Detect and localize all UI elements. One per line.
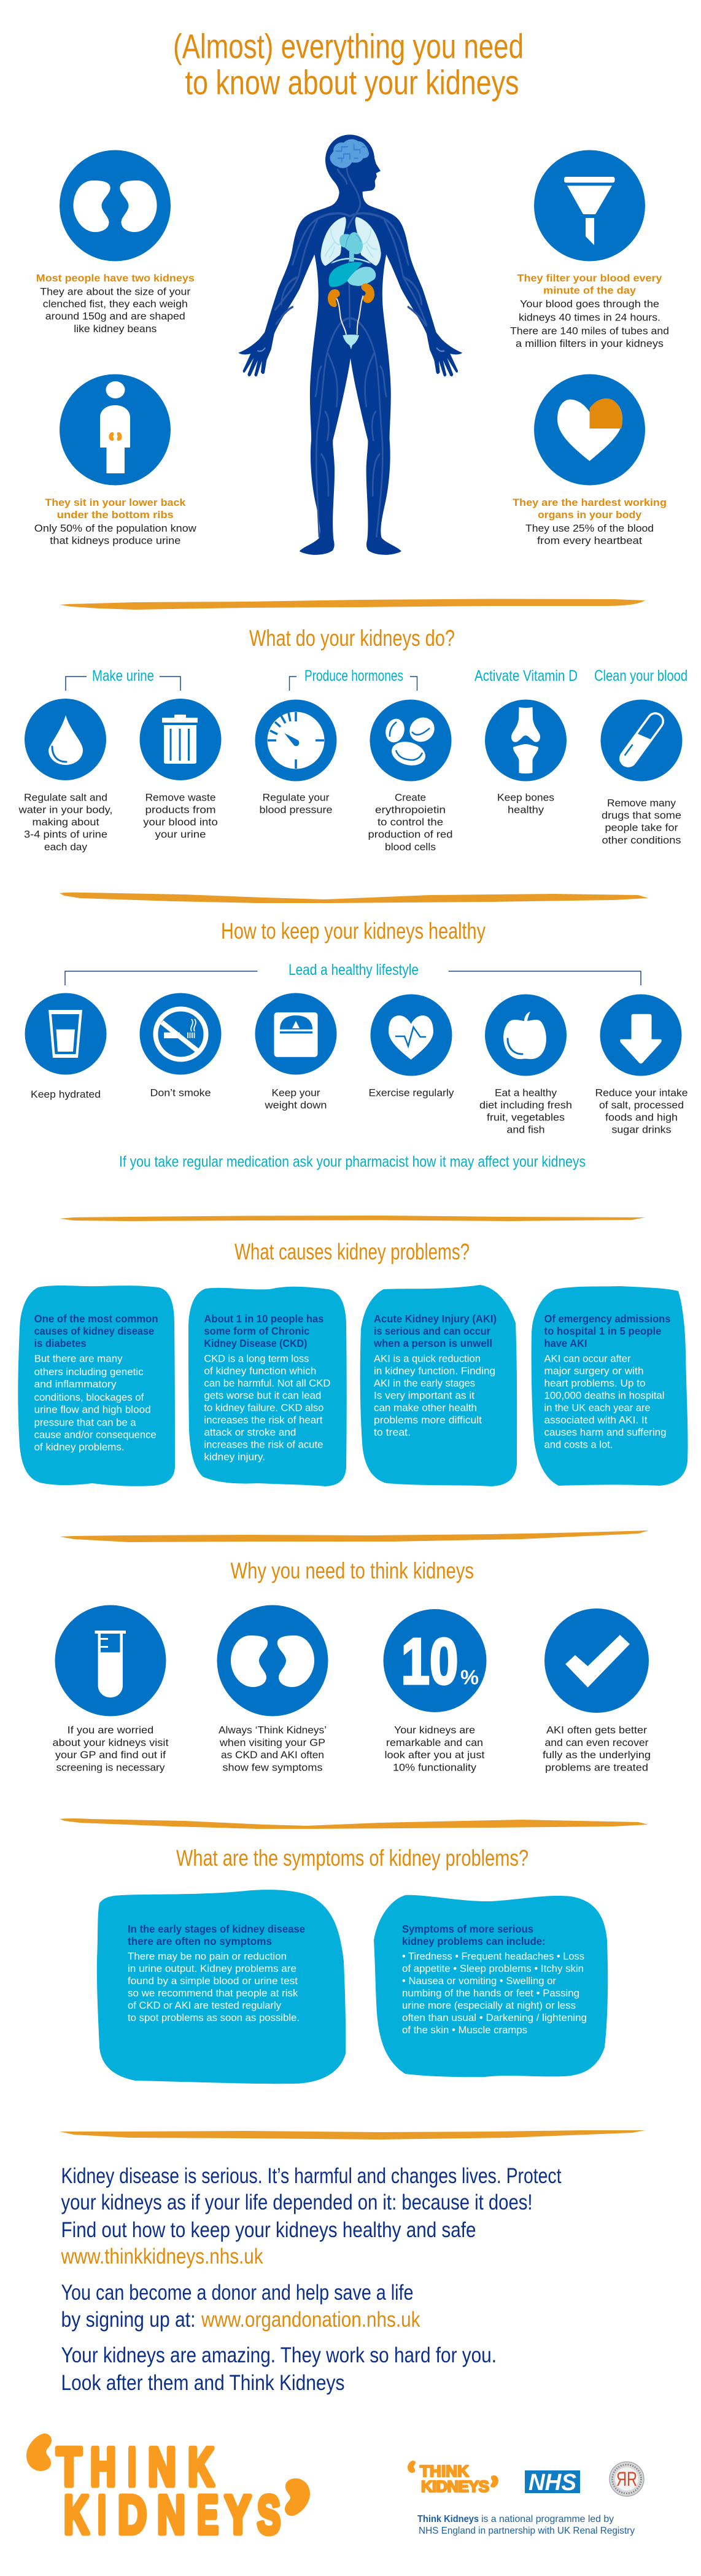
text: healthy diet: fruit, vegetables <box>487 1112 565 1123</box>
panel: AKI <box>360 1285 517 1486</box>
section: what do your kidneys do <box>18 626 687 853</box>
panel: CKD: some form of Chronic <box>204 1325 310 1337</box>
text block: clenched fist, they each weigh <box>43 298 188 310</box>
panel: diabetes: But there are many <box>34 1352 123 1364</box>
stomach <box>347 266 376 286</box>
panel: CKD: gets worse but it can lead <box>204 1389 321 1401</box>
text block: around 150g and are shaped <box>45 311 185 322</box>
text: remove drugs: other conditions <box>602 834 681 846</box>
logo: think kidneys large <box>26 2434 310 2545</box>
icon: person with kidneys <box>60 374 171 485</box>
heading: Why you need to think kidneys <box>231 1558 474 1583</box>
text: always think kidneys: show few symptoms <box>222 1762 323 1773</box>
label: make urine with bracket: Make urine <box>92 667 154 685</box>
panel: early stages: there are often no symptoms <box>128 1935 272 1947</box>
text block <box>36 273 195 335</box>
text: AKI recovery <box>543 1724 651 1773</box>
text: AKI recovery: problems are treated <box>545 1762 648 1773</box>
text: become a donor: www.organdonation.nhs.uk <box>201 2308 420 2332</box>
text: programme credit: NHS England in partnership with UK Renal Registry <box>419 2526 635 2536</box>
panel: diabetes: urine flow and high blood <box>34 1404 151 1416</box>
text: keep bones healthy: Keep bones <box>497 791 554 803</box>
panel: diabetes: cause and/or consequence <box>34 1429 157 1440</box>
panel: serious symptoms: numbing of the hands or feet • Passing <box>402 1987 579 1999</box>
logo: think kidneys small: KIDNEYS <box>421 2477 489 2496</box>
icon: check mark <box>544 1608 649 1713</box>
text: regulate salt: water in your body, <box>18 804 113 815</box>
panel: AKI admissions: associated with AKI. It <box>544 1414 648 1426</box>
panel: early stages: In the early stages of kidney disease <box>128 1923 305 1935</box>
text: regulate salt: making about <box>32 817 99 828</box>
text: keep bones healthy: healthy <box>508 804 544 815</box>
icon: 10 percent <box>383 1609 486 1712</box>
panel: serious symptoms: kidney problems can include: <box>402 1935 545 1947</box>
panel: AKI: AKI in the early stages <box>374 1377 475 1389</box>
body silhouette <box>238 134 462 555</box>
icon: kidneys <box>217 1605 328 1717</box>
text: always think kidneys: when visiting your GP <box>219 1737 325 1748</box>
text block: under the bottom ribs <box>57 509 174 521</box>
heading: What are the symptoms of kidney problems? <box>176 1845 529 1871</box>
logo: think kidneys large: S <box>257 2484 281 2545</box>
icon: pressure gauge <box>255 700 336 781</box>
logo: think kidneys large: I <box>128 2436 136 2497</box>
text block: organs in your body <box>538 509 642 521</box>
icon: pill capsule <box>600 700 683 781</box>
panel: diabetes: and inflammatory <box>34 1378 117 1390</box>
panel: serious symptoms: Symptoms of more serious <box>402 1923 533 1935</box>
panel: diabetes: others including genetic <box>34 1366 144 1378</box>
text: remove drugs: Remove many <box>607 797 676 809</box>
heart <box>339 232 363 262</box>
text: remarkable: look after you at just <box>384 1749 485 1761</box>
text: always think kidneys: as CKD and AKI often <box>221 1749 324 1761</box>
fact: filter <box>510 150 669 349</box>
logo: think kidneys large: H <box>90 2436 116 2497</box>
text: programme credit: is a national programme led by <box>481 2514 614 2524</box>
text: worried <box>53 1724 169 1773</box>
text: kidney disease is serious: Kidney disease is serious. It’s harmful and changes lives. Protect <box>61 2164 562 2188</box>
text: worried: your GP and find out if <box>55 1749 166 1761</box>
panel: AKI: to treat. <box>374 1426 411 1438</box>
icon: down arrow <box>600 995 681 1076</box>
logo: think kidneys small <box>408 2461 498 2496</box>
panel: AKI: problems more difficult <box>374 1414 482 1426</box>
fact: hardest working <box>513 374 667 546</box>
text block: from every heartbeat <box>537 535 642 546</box>
panel: serious symptoms: • Tiredness • Frequent headaches • Loss <box>402 1950 584 1962</box>
text: kidney disease is serious: Find out how to keep your kidneys healthy and safe <box>61 2218 476 2242</box>
panel: AKI: in kidney function. Finding <box>374 1365 495 1376</box>
text: your kidneys are amazing: Look after them and Think Kidneys <box>61 2371 345 2395</box>
panel: serious symptoms: urine more (especially at night) or less <box>402 2000 576 2011</box>
logo: think kidneys large: K <box>64 2484 89 2545</box>
lungs <box>320 217 381 266</box>
text: worried: about your kidneys visit <box>53 1737 169 1748</box>
label: lead a healthy lifestyle with bracket: Lead a healthy lifestyle <box>289 961 419 979</box>
logo: think kidneys large: E <box>197 2484 219 2545</box>
panel: CKD: increases the risk of heart <box>204 1414 323 1426</box>
text: AKI recovery: and can even recover <box>545 1737 649 1748</box>
text: reduce intake: foods and high <box>605 1112 678 1123</box>
logo: think kidneys large: Y <box>225 2484 251 2545</box>
panel: diabetes: One of the most common <box>34 1313 158 1325</box>
panel: AKI admissions: and costs a lot. <box>544 1438 613 1450</box>
panel: serious symptoms: of the skin • Muscle cramps <box>402 2024 527 2036</box>
text: reduce intake: sugar drinks <box>611 1124 672 1136</box>
text: reduce intake: Reduce your intake <box>595 1087 687 1099</box>
text: remove waste: products from <box>145 804 216 815</box>
text: exercise regularly: Exercise regularly <box>368 1087 454 1099</box>
text: don't smoke: Don’t smoke <box>150 1087 211 1099</box>
text block <box>510 273 669 349</box>
ureters <box>336 296 363 335</box>
text: regulate salt: 3-4 pints of urine <box>24 829 107 840</box>
label: produce hormones with bracket <box>290 667 417 691</box>
text: regulate salt: Regulate salt and <box>24 791 107 803</box>
text: keep bones healthy <box>497 791 554 815</box>
title: to know about your kidneys <box>185 63 519 102</box>
panel: CKD: to kidney failure. CKD also <box>204 1402 323 1413</box>
bladder <box>343 335 359 349</box>
panel: serious symptoms: • Nausea or vomiting • Swelling or <box>402 1975 556 1987</box>
text: AKI recovery: fully as the underlying <box>543 1749 651 1761</box>
panel: AKI admissions: causes harm and suffering <box>544 1426 667 1438</box>
text: programme credit <box>417 2514 635 2536</box>
icon: glass of water <box>25 993 107 1074</box>
panel: AKI admissions: AKI can occur after <box>544 1352 631 1364</box>
text block: They sit in your lower back <box>45 497 186 508</box>
text: remove drugs <box>602 797 681 846</box>
section: symptoms <box>97 1845 608 2084</box>
panel: diabetes: causes of kidney disease <box>34 1325 154 1337</box>
panel: early stages <box>97 1890 346 2084</box>
text: keep weight down: Keep your <box>271 1087 320 1099</box>
brain <box>330 139 369 168</box>
text block: They are the hardest working <box>513 497 667 508</box>
panel: diabetes <box>18 1286 175 1486</box>
panel: AKI: AKI is a quick reduction <box>374 1352 481 1364</box>
text: worried: If you are worried <box>68 1724 153 1736</box>
label: produce hormones with bracket: Produce hormones <box>304 667 403 685</box>
panel: serious symptoms: often than usual • Darkening / lightening <box>402 2012 587 2023</box>
title <box>173 27 524 102</box>
panel: diabetes: pressure that can be a <box>34 1416 136 1428</box>
panel: AKI: Acute Kidney Injury (AKI) <box>374 1313 497 1325</box>
text: remove waste <box>143 791 218 840</box>
panel: AKI: can make other health <box>374 1402 477 1413</box>
panel: AKI admissions: Of emergency admissions <box>544 1313 671 1325</box>
text: always think kidneys: Always ‘Think Kidneys’ <box>219 1724 327 1736</box>
text: remarkable: 10% functionality <box>393 1762 477 1773</box>
panel: diabetes: of kidney problems. <box>34 1441 125 1453</box>
panel: early stages: so we recommend that people at risk <box>128 1987 298 1999</box>
text: keep weight down <box>264 1087 327 1111</box>
panel: CKD: About 1 in 10 people has <box>204 1313 324 1325</box>
panel: AKI: when a person is unwell <box>373 1337 492 1349</box>
kidneys <box>328 284 374 307</box>
callout: medication: If you take regular medication ask your pharmacist how it may affect your kidneys <box>119 1154 586 1171</box>
panel: early stages: to spot problems as soon as possible. <box>128 2012 300 2023</box>
logo: think kidneys small: THINK <box>420 2462 469 2480</box>
liver <box>329 262 363 287</box>
section: why you need to think kidneys <box>53 1558 651 1773</box>
panel: AKI admissions <box>532 1286 688 1486</box>
text block: minute of the day <box>543 285 637 297</box>
icon: red blood cells <box>370 700 452 781</box>
logo: think kidneys large: I <box>98 2484 106 2545</box>
text: erythropoietin: production of red <box>368 829 453 840</box>
panel: CKD: kidney injury. <box>204 1451 265 1462</box>
label: make urine with bracket <box>66 667 180 691</box>
text: become a donor <box>61 2281 420 2332</box>
text: remove waste: your blood into <box>143 817 218 828</box>
text block: Most people have two kidneys <box>36 273 195 284</box>
fact: two kidneys <box>36 150 195 335</box>
text: regulate salt <box>18 791 113 853</box>
text: remove drugs: drugs that some <box>602 810 681 821</box>
text: remarkable <box>384 1724 485 1773</box>
text: healthy diet <box>479 1087 572 1136</box>
logo: think kidneys large: T <box>56 2436 82 2497</box>
text: keep weight down: weight down <box>264 1100 327 1111</box>
logo: think kidneys large: N <box>157 2484 185 2545</box>
icon: heart with pulse <box>371 995 452 1076</box>
panel: early stages: found by a simple blood or urine test <box>128 1975 298 1987</box>
section: what causes kidney problems <box>18 1240 688 1486</box>
panel: early stages: of CKD or AKI are tested regularly <box>128 2000 281 2011</box>
text block: kidneys 40 times in 24 hours. <box>519 312 660 324</box>
text: reduce intake: of salt, processed <box>599 1100 684 1111</box>
icon: 10 percent: % <box>460 1666 479 1688</box>
icon: funnel <box>534 150 645 262</box>
panel: CKD: increases the risk of acute <box>204 1438 323 1450</box>
logo: UK Renal Registry: ЯR <box>616 2468 637 2490</box>
panel: CKD: attack or stroke and <box>204 1426 296 1438</box>
text: erythropoietin <box>368 791 453 853</box>
text: erythropoietin: erythropoietin <box>375 804 446 815</box>
text block <box>513 497 667 546</box>
text block: They filter your blood every <box>517 273 662 284</box>
text: kidney disease is serious <box>61 2164 562 2268</box>
text: healthy diet: Eat a healthy <box>495 1087 557 1099</box>
panel: diabetes: conditions, blockages of <box>34 1392 144 1403</box>
text block: like kidney beans <box>74 323 157 335</box>
text block: There are 140 miles of tubes and <box>510 325 669 336</box>
text: become a donor: by signing up at: <box>61 2308 195 2332</box>
panel: diabetes: is diabetes <box>34 1337 87 1349</box>
panel: CKD: Kidney Disease (CKD) <box>204 1337 307 1349</box>
logo: think kidneys large: K <box>188 2436 214 2497</box>
icon: water drop <box>25 699 106 780</box>
panel: AKI admissions: 100,000 deaths in hospital <box>544 1389 664 1401</box>
text: erythropoietin: blood cells <box>385 841 436 853</box>
text: remove waste: your urine <box>155 829 206 840</box>
text: always think kidneys <box>219 1724 327 1773</box>
text: blood pressure <box>259 791 333 815</box>
section: how to keep kidneys healthy <box>25 918 687 1171</box>
text: blood pressure: Regulate your <box>263 791 330 803</box>
logo: think kidneys large: D <box>118 2484 147 2545</box>
text block: Your blood goes through the <box>520 298 659 310</box>
veins <box>258 168 444 537</box>
logo: UK Renal Registry <box>610 2462 644 2496</box>
text: keep hydrated: Keep hydrated <box>31 1088 101 1100</box>
text: kidney disease is serious: www.thinkkidneys.nhs.uk <box>61 2244 263 2268</box>
text block: They are about the size of your <box>40 286 191 297</box>
icon: knee bones <box>485 700 567 781</box>
panel: early stages: in urine output. Kidney problems are <box>128 1963 296 1974</box>
icon: test tube <box>55 1605 166 1717</box>
panel: serious symptoms <box>374 1895 608 2077</box>
text: erythropoietin: Create <box>395 791 426 803</box>
panel: early stages: There may be no pain or reduction <box>128 1950 287 1962</box>
heading: What causes kidney problems? <box>234 1240 470 1265</box>
panel: AKI admissions: in the UK each year are <box>544 1402 651 1413</box>
text: kidney disease is serious: your kidneys as if your life depended on it: because it does! <box>61 2190 533 2214</box>
text: blood pressure: blood pressure <box>259 804 333 815</box>
icon: apple <box>485 995 567 1076</box>
text: healthy diet: and fish <box>507 1124 545 1136</box>
icon: heart <box>534 374 645 485</box>
panel: CKD: CKD is a long term loss <box>204 1352 309 1364</box>
text: your kidneys are amazing: Your kidneys are amazing. They work so hard for you. <box>61 2343 497 2367</box>
text: worried: screening is necessary <box>56 1762 165 1773</box>
text: AKI recovery: AKI often gets better <box>546 1724 647 1736</box>
text: regulate salt: each day <box>44 841 88 853</box>
text block: a million filters in your kidneys <box>516 338 664 349</box>
panel: serious symptoms: of appetite • Sleep problems • Itchy skin <box>402 1963 584 1974</box>
panel: AKI admissions: to hospital 1 in 5 people <box>544 1325 662 1337</box>
panel: CKD: of kidney function which <box>204 1365 316 1376</box>
icon: 10 percent: 10 <box>401 1626 458 1698</box>
panel: AKI admissions: have AKI <box>544 1337 587 1349</box>
text block <box>34 497 197 546</box>
fact: location <box>34 374 197 546</box>
panel: CKD: can be harmful. Not all CKD <box>204 1377 330 1389</box>
panel: CKD <box>188 1287 347 1486</box>
heading: How to keep your kidneys healthy <box>221 918 486 944</box>
icon: weighing scales <box>255 993 336 1074</box>
text: programme credit: Think Kidneys <box>417 2514 479 2524</box>
text: remarkable: Your kidneys are <box>394 1724 475 1736</box>
text: healthy diet: diet including fresh <box>479 1100 572 1111</box>
logo: NHS: NHS <box>529 2470 576 2496</box>
panel: AKI admissions: heart problems. Up to <box>544 1377 646 1389</box>
text: reduce intake <box>595 1087 687 1136</box>
text block: Only 50% of the population know <box>34 522 197 534</box>
text: erythropoietin: to control the <box>378 817 443 828</box>
text: remove waste: Remove waste <box>145 791 216 803</box>
title: (Almost) everything you need <box>173 27 524 65</box>
text: remove drugs: people take for <box>605 822 678 834</box>
closing message <box>61 2164 562 2395</box>
panel: human body illustration <box>238 134 462 555</box>
icon: bin <box>140 699 221 780</box>
label: lead a healthy lifestyle with bracket <box>65 961 641 985</box>
text block: that kidneys produce urine <box>50 535 180 546</box>
text block: They use 25% of the blood <box>525 522 654 534</box>
label: activate vitamin D: Activate Vitamin D <box>474 667 578 685</box>
text: become a donor: You can become a donor and help save a life <box>61 2281 414 2305</box>
panel: AKI: is serious and can occur <box>374 1325 490 1337</box>
text: remarkable: remarkable and can <box>386 1737 483 1748</box>
panel: AKI admissions: major surgery or with <box>544 1365 643 1376</box>
heading: What do your kidneys do? <box>249 626 455 651</box>
icon: no smoking <box>140 993 221 1074</box>
panel: AKI: Is very important as it <box>374 1389 474 1401</box>
icon: kidneys <box>60 150 171 262</box>
text: your kidneys are amazing <box>61 2343 497 2395</box>
logo: think kidneys large: N <box>148 2436 176 2497</box>
